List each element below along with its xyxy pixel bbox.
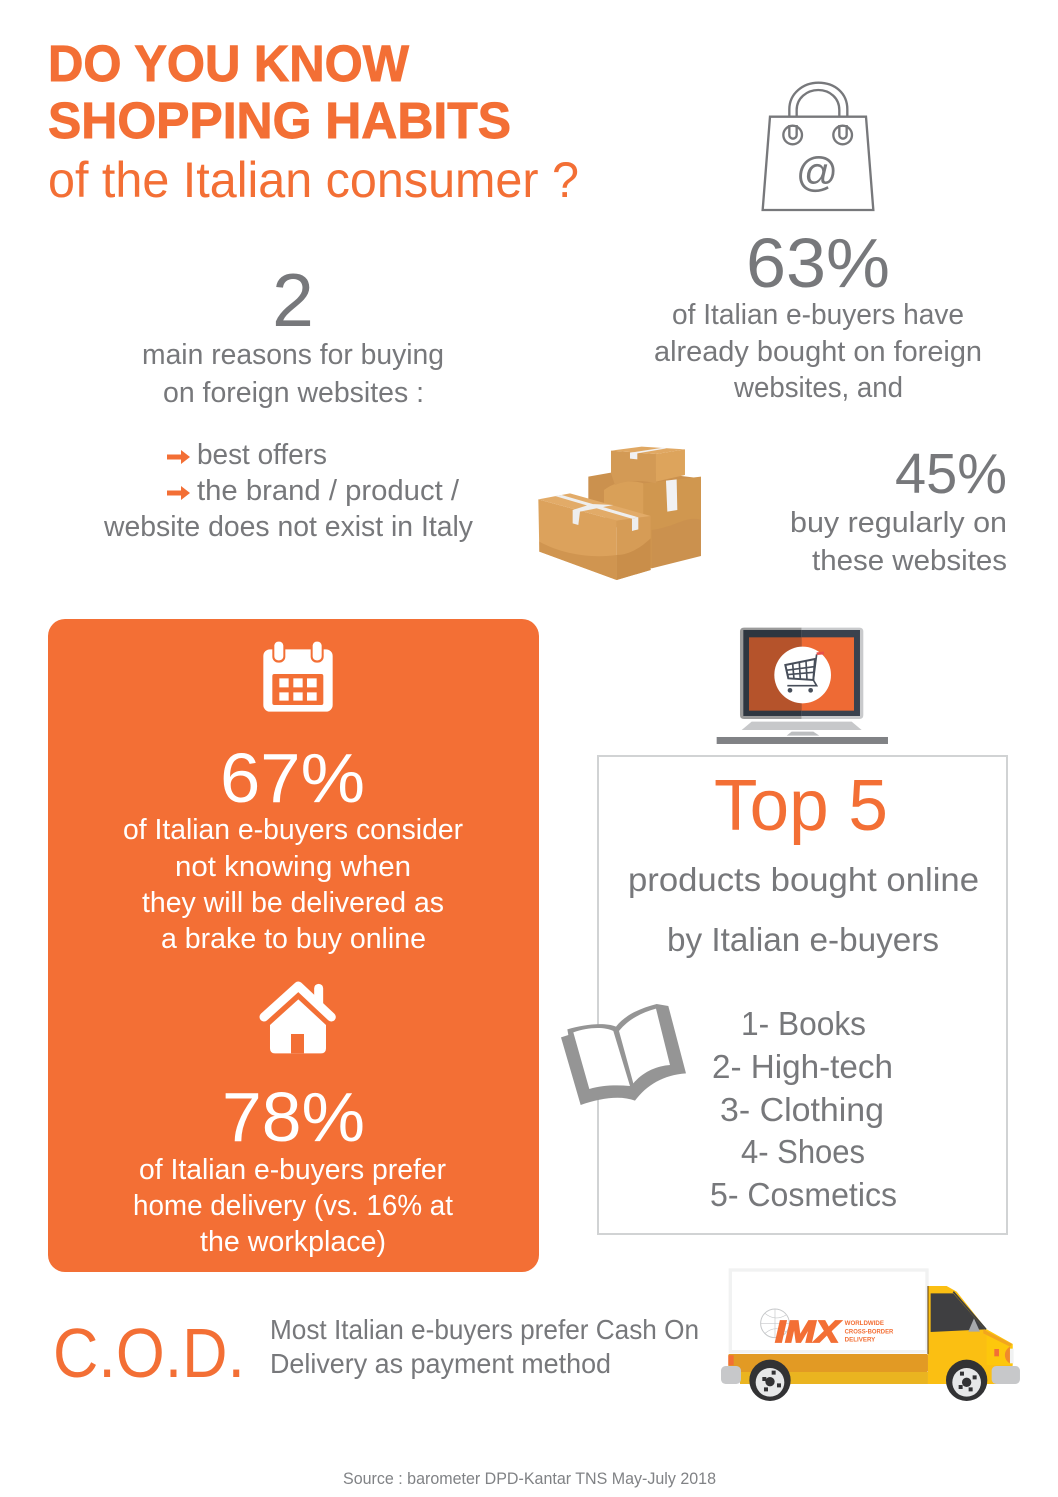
stat: 67%: they will be delivered as bbox=[142, 887, 444, 919]
title bbox=[48, 35, 579, 208]
block: 2 main reasons bbox=[142, 258, 444, 409]
icon: delivery truck: CROSS-BORDER bbox=[845, 1328, 893, 1335]
block: 2 main reasons: on foreign websites : bbox=[163, 377, 424, 409]
title: of the Italian consumer ? bbox=[48, 152, 579, 208]
reasons list bbox=[103, 439, 473, 543]
block: 2 main reasons: main reasons for buying bbox=[142, 339, 444, 371]
text: cash on delivery: Delivery as payment method bbox=[270, 1348, 611, 1379]
icon: delivery truck: DELIVERY bbox=[845, 1337, 876, 1344]
heading: C.O.D.: C.O.D. bbox=[53, 1314, 245, 1392]
subheading bbox=[628, 861, 979, 958]
icon: open book bbox=[561, 1004, 686, 1105]
subheading: products bought online bbox=[628, 861, 979, 898]
title: DO YOU KNOW bbox=[48, 35, 410, 92]
icon: delivery truck: WORLDWIDE bbox=[845, 1320, 884, 1327]
stat: 78%: home delivery (vs. 16% at bbox=[133, 1190, 453, 1222]
stat: 78%: of Italian e-buyers prefer bbox=[139, 1154, 446, 1186]
stat: 67%: a brake to buy online bbox=[161, 923, 426, 955]
source note: Source : barometer DPD-Kantar TNS May-July 2018 bbox=[343, 1469, 716, 1488]
icon: laptop with cart bbox=[717, 628, 888, 744]
stat: 45% regular buyers bbox=[790, 442, 1007, 577]
stat: 67%: of Italian e-buyers consider bbox=[123, 814, 463, 846]
reasons list: website does not exist in Italy bbox=[103, 511, 473, 543]
stat: 45% regular buyers: 45% bbox=[895, 442, 1007, 506]
product list: 1- Books bbox=[741, 1005, 866, 1042]
reasons list: the brand / product / bbox=[197, 475, 460, 507]
stat: 63% foreign purchases: already bought on foreign bbox=[654, 336, 982, 368]
text: cash on delivery bbox=[270, 1314, 699, 1379]
arrow: first reason bbox=[167, 450, 190, 464]
title: SHOPPING HABITS bbox=[48, 92, 511, 149]
stat: 67%: not knowing when bbox=[175, 851, 411, 883]
stat: 45% regular buyers: these websites bbox=[812, 545, 1007, 577]
product list bbox=[710, 1005, 897, 1213]
text: cash on delivery: Most Italian e-buyers prefer Cash On bbox=[270, 1314, 699, 1345]
block: 2 main reasons: 2 bbox=[272, 258, 314, 342]
icon: house bbox=[264, 986, 331, 1053]
stat: 78%: the workplace) bbox=[200, 1226, 386, 1258]
icon: shopping bag: @ bbox=[796, 149, 838, 196]
heading: top 5: Top 5 bbox=[714, 766, 888, 846]
icon: delivery truck: IMX bbox=[775, 1315, 841, 1349]
stat: 63% foreign purchases bbox=[654, 224, 982, 404]
reasons list: best offers bbox=[197, 439, 327, 471]
product list: 4- Shoes bbox=[741, 1133, 865, 1170]
panel: delivery stats bbox=[48, 619, 539, 1272]
subheading: by Italian e-buyers bbox=[667, 921, 939, 958]
stat: 63% foreign purchases: of Italian e-buyers have bbox=[672, 299, 964, 331]
product list: 5- Cosmetics bbox=[710, 1176, 897, 1213]
icon: shopping bag bbox=[763, 83, 873, 210]
stat: 45% regular buyers: buy regularly on bbox=[790, 507, 1007, 539]
product list: 2- High-tech bbox=[712, 1048, 893, 1085]
stat: 78%: 78% bbox=[222, 1078, 365, 1156]
icon: delivery truck bbox=[721, 1270, 1020, 1401]
stat: 67% bbox=[123, 739, 463, 955]
stat: 63% foreign purchases: 63% bbox=[746, 224, 890, 302]
stat: 78% bbox=[133, 1078, 453, 1258]
stat: 67%: 67% bbox=[220, 739, 365, 817]
icon: calendar bbox=[263, 641, 333, 712]
icon: cardboard boxes bbox=[538, 447, 701, 580]
stat: 63% foreign purchases: websites, and bbox=[733, 372, 903, 404]
product list: 3- Clothing bbox=[720, 1091, 884, 1128]
panel: top 5 products bbox=[598, 756, 1007, 1234]
arrow: second reason bbox=[167, 486, 190, 500]
